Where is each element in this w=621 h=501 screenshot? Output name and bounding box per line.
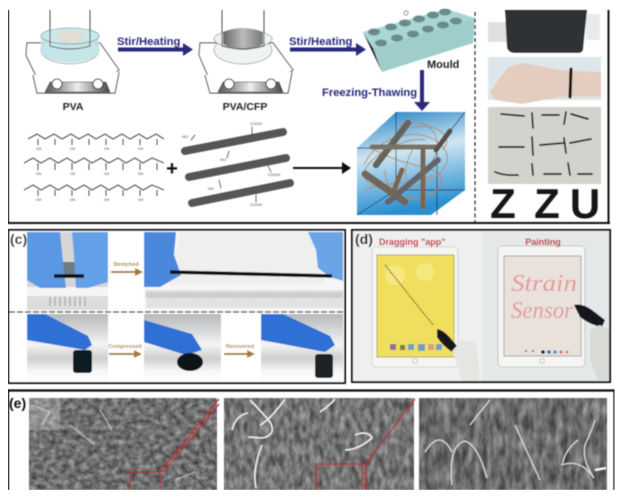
label: PVA: PVA: [63, 101, 84, 113]
photo: black sheet: [488, 10, 602, 54]
PVA molecular chains: OH: [36, 147, 42, 151]
text: ZZU: U: [570, 180, 600, 227]
arrow: compressed: [108, 344, 142, 358]
SEM image: high magnification: [419, 398, 607, 490]
tablet: painting: [498, 246, 609, 380]
SEM image: medium magnification: [224, 398, 415, 490]
arrow: stir/heating 1: [117, 36, 193, 56]
PVA molecular chains: OH: [104, 172, 110, 176]
text: ZZU: Z: [534, 180, 560, 227]
photo: recovered: [261, 314, 343, 382]
PVA molecular chains: OH: [104, 198, 110, 202]
photo: wrist with band: [488, 57, 601, 104]
label: mould: Mould: [427, 59, 459, 71]
zoom box: [130, 399, 219, 490]
PVA molecular chains: OH: [138, 172, 144, 176]
label: (e): (e): [9, 395, 26, 411]
plus sign: +: [166, 158, 178, 180]
photo: before stretching: [27, 232, 108, 312]
PVA molecular chains: OH: [138, 147, 144, 151]
arrow: recovered: [224, 344, 255, 358]
panel: sample photos: [488, 10, 602, 227]
PVA molecular chains: OH: [70, 172, 76, 176]
carbon fibres with carboxyl groups: HO: [182, 134, 188, 139]
arrow: stretched: Stretched: [113, 262, 139, 268]
photo: patterned strips: [488, 107, 601, 184]
panel e: SEM images: [8, 390, 614, 490]
photo: compressed: [144, 314, 221, 382]
photo: before compression: [27, 314, 108, 382]
PVA molecular chains: [24, 134, 164, 202]
carbon fibres with carboxyl groups: COOH: [268, 172, 280, 177]
handwriting: Sensor: [511, 298, 574, 324]
carbon fibres with carboxyl groups: COOH: [250, 121, 262, 126]
text: ZZU: [490, 180, 600, 227]
dashed divider: [474, 12, 476, 222]
hot plate with PVA/CFP: [199, 10, 293, 93]
arrow: recovered: Recovered: [226, 344, 254, 350]
PVA molecular chains: OH: [70, 198, 76, 202]
carbon fibres with carboxyl groups: HO: [208, 186, 214, 191]
PVA molecular chains: OH: [104, 147, 110, 151]
zoom box: [316, 399, 415, 490]
label: (d): (d): [355, 231, 373, 247]
SEM image: low magnification: [29, 398, 219, 490]
panel: fabrication scheme: [8, 8, 610, 223]
label: dragging app: Dragging "app": [379, 237, 446, 247]
icon: mould: [363, 8, 475, 72]
label: (c): (c): [10, 231, 27, 247]
arrow: to composite: [293, 162, 351, 174]
hot plate with PVA: [26, 10, 119, 93]
panel c: mechanical photos: [8, 230, 345, 383]
tablet: dragging app: [372, 247, 480, 381]
handwriting: [511, 271, 577, 324]
text: ZZU: Z: [490, 180, 516, 227]
arrow: stretched: [111, 262, 143, 276]
hydrogel cube: [357, 112, 465, 215]
arrow: stir/heating 2: Stir/Heating: [289, 36, 352, 48]
arrow: stir/heating 1: Stir/Heating: [117, 36, 180, 48]
carbon fibres with carboxyl groups: [182, 121, 290, 207]
dashed divider: [9, 311, 345, 313]
carbon fibres with carboxyl groups: HO: [220, 157, 226, 162]
PVA molecular chains: OH: [36, 172, 42, 176]
panel d: touch screen demonstration: [352, 230, 610, 382]
arrow: freezing-thawing: [322, 70, 430, 111]
label: PVA/CFP: PVA/CFP: [223, 101, 267, 113]
handwriting: Strain: [511, 271, 577, 297]
PVA molecular chains: OH: [138, 198, 144, 202]
arrow: freezing-thawing: Freezing-Thawing: [322, 87, 417, 99]
arrow: stir/heating 2: [289, 36, 366, 56]
label: painting: Painting: [525, 237, 561, 247]
arrow: compressed: Compressed: [108, 344, 142, 350]
PVA molecular chains: OH: [36, 198, 42, 202]
PVA molecular chains: OH: [70, 147, 76, 151]
photo: stretched: [144, 232, 343, 312]
carbon fibres with carboxyl groups: COOH: [250, 202, 262, 207]
